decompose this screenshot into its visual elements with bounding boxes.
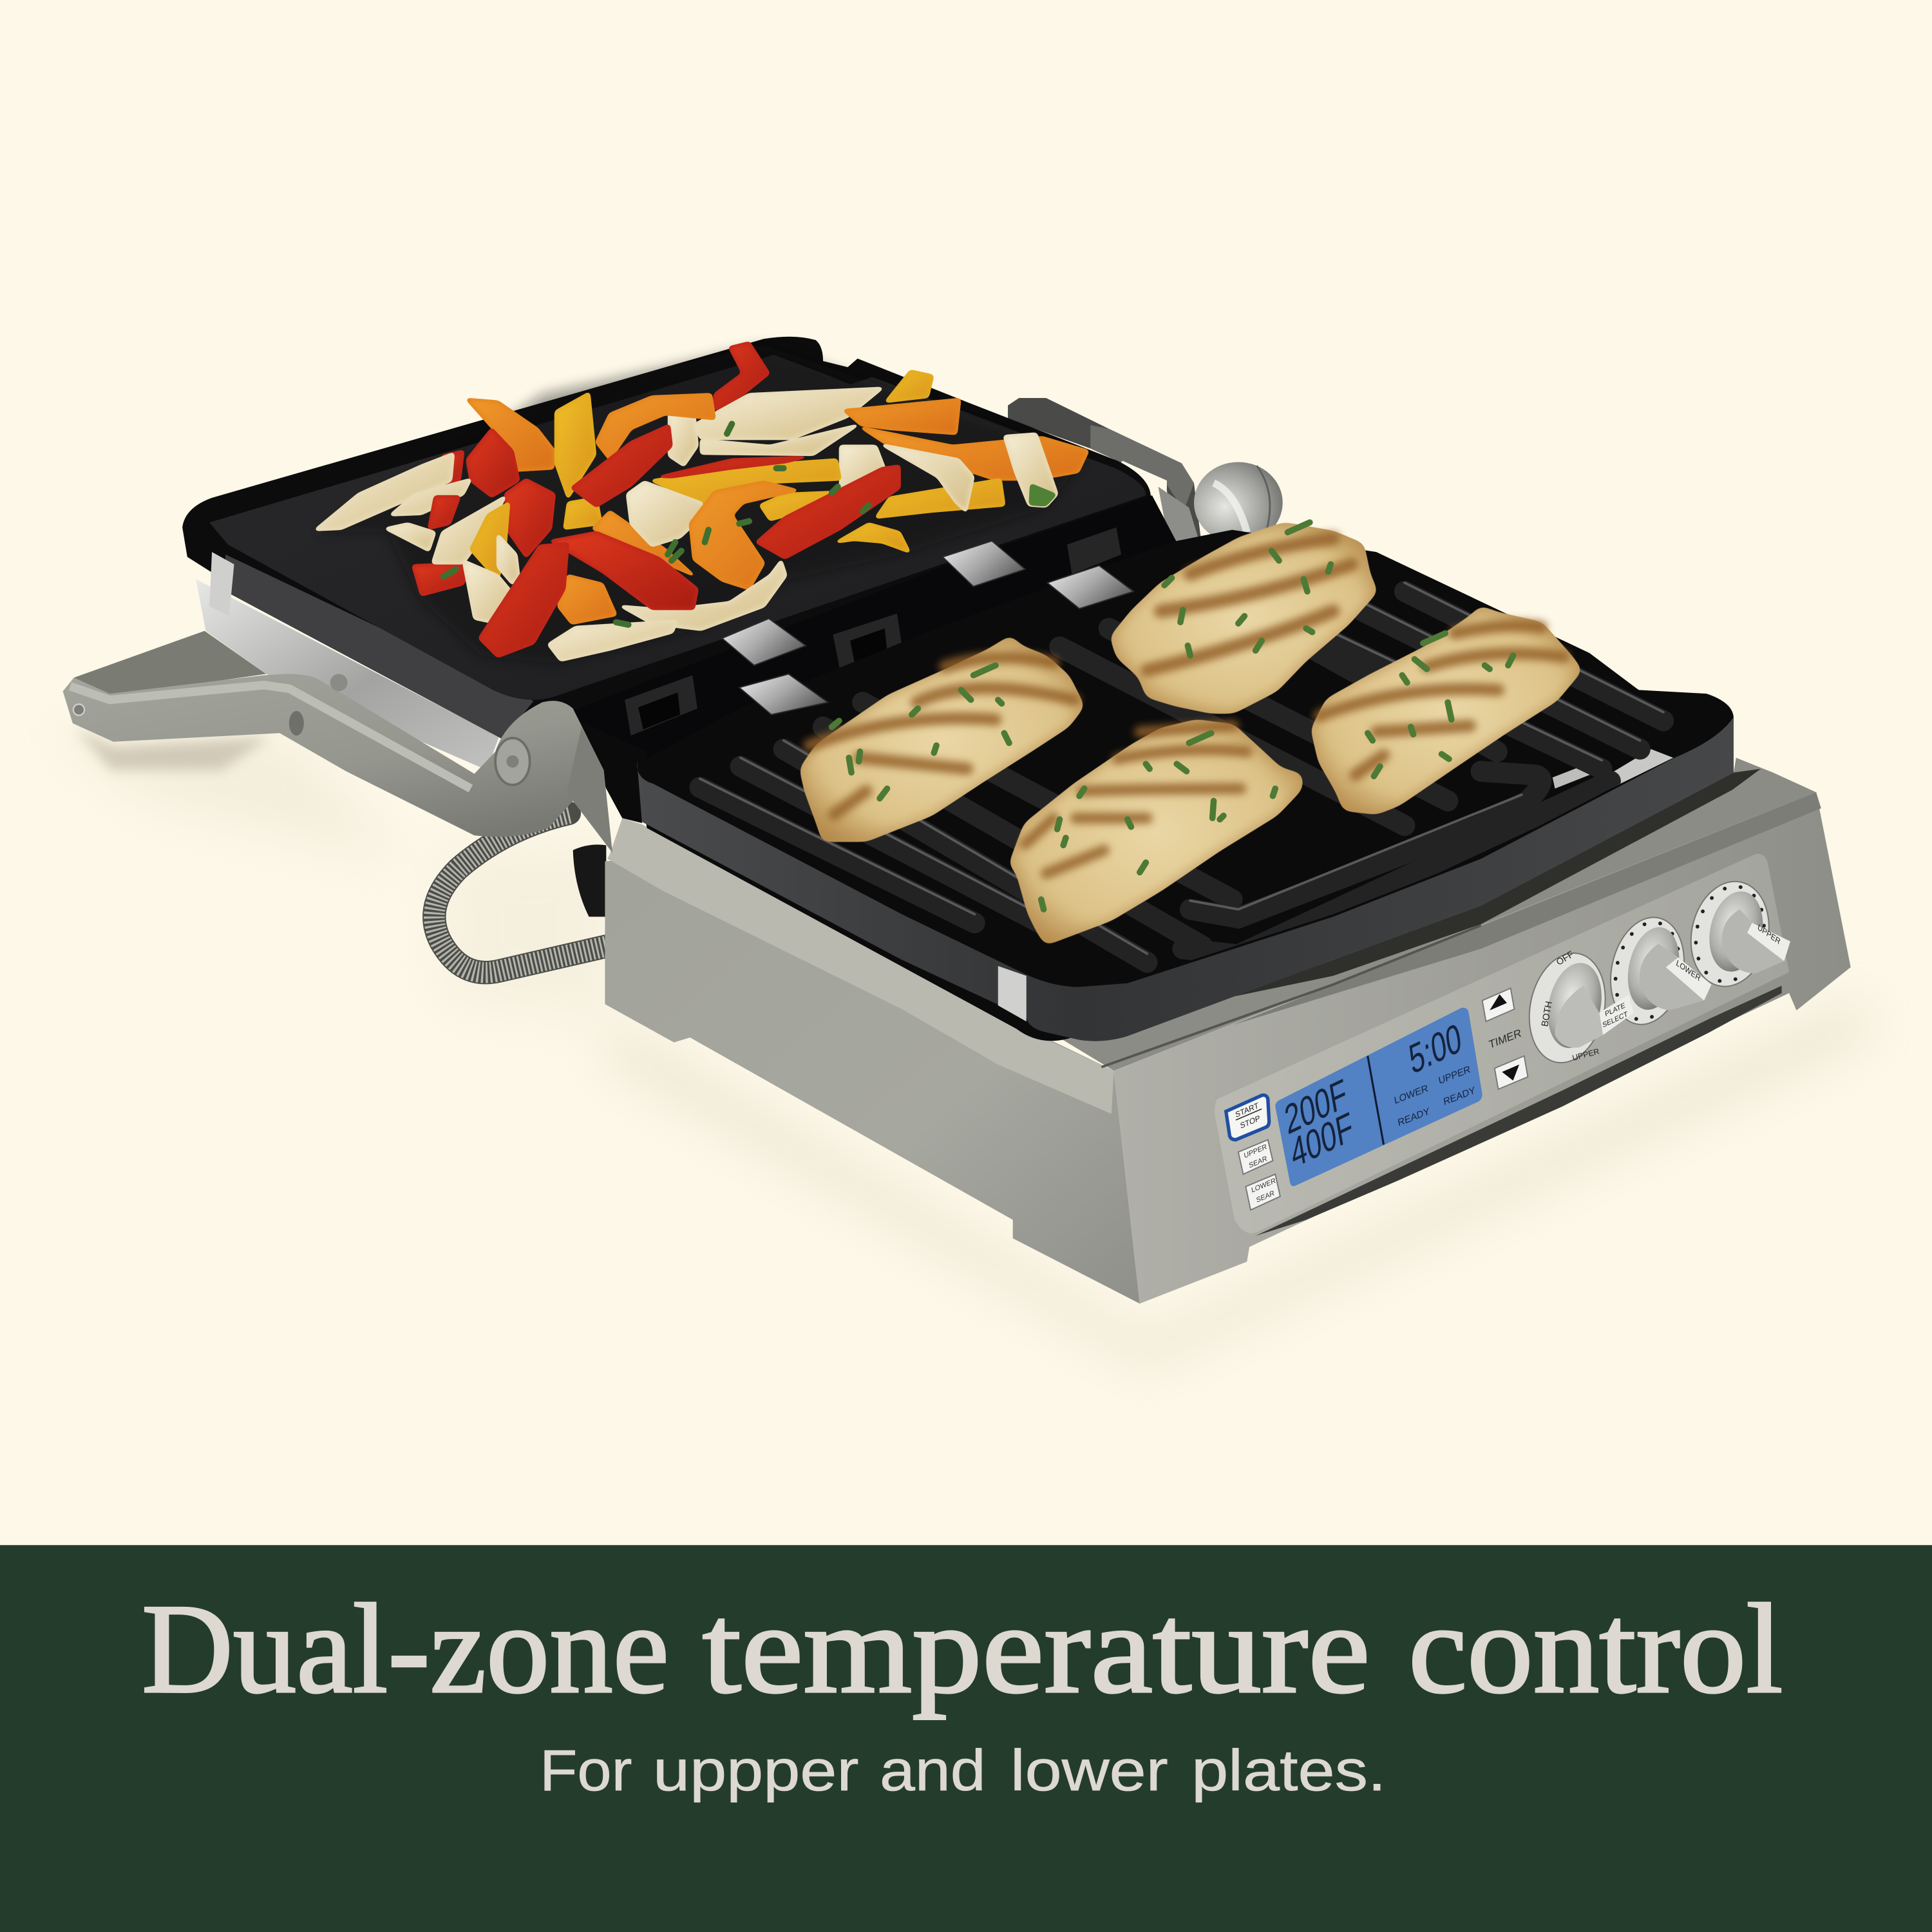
base left face (605, 857, 1140, 1303)
lcd display: READY (1443, 1084, 1476, 1108)
title: Dual-zone (142, 1578, 669, 1720)
silver lip clip (998, 966, 1027, 1021)
subtitle: uppper (653, 1739, 859, 1803)
base front panel (1114, 792, 1851, 1303)
subtitle: and (880, 1739, 986, 1803)
parsley on vegetables (444, 424, 869, 625)
chicken breast: left (801, 637, 1083, 840)
subtitle (540, 1739, 1386, 1803)
chicken breast: bottom (1010, 721, 1301, 944)
vegetable shadow (318, 345, 1084, 663)
steel rear knob (1194, 462, 1283, 544)
lcd display: 5:00 (1406, 1014, 1464, 1083)
chicken breast: right (1312, 607, 1581, 813)
plate select knob: BOTH (1540, 1000, 1555, 1027)
control panel recess (1215, 854, 1789, 1233)
plate select knob: OFF (1555, 949, 1576, 968)
start stop button (1226, 1095, 1269, 1140)
subtitle: lower (1010, 1739, 1168, 1803)
chrome hinge clips (722, 541, 1133, 715)
start stop button: START (1235, 1101, 1260, 1119)
plate select knob (1520, 946, 1634, 1070)
lcd display: 400F (1287, 1103, 1356, 1177)
subtitle: plates. (1191, 1739, 1386, 1803)
upper sear button: UPPER (1244, 1143, 1267, 1160)
grill front lip (637, 717, 1734, 1041)
title: temperature (703, 1578, 1370, 1720)
title: control (1408, 1578, 1783, 1720)
lcd display: 200F (1282, 1070, 1350, 1144)
start stop button: STOP (1240, 1113, 1261, 1131)
groove under grill lip (1101, 769, 1761, 1067)
plate select knob: SELECT (1602, 1010, 1629, 1030)
plate select knob: PLATE (1604, 1001, 1625, 1018)
base top rim (1027, 758, 1816, 1071)
timer controls: TIMER (1488, 1026, 1522, 1051)
rear clip and arm (1008, 398, 1201, 552)
lcd display: LOWER (1394, 1083, 1429, 1106)
timer controls (1482, 988, 1528, 1089)
lower knob: LOWER (1675, 958, 1701, 983)
dark foot behind base (573, 845, 606, 916)
lcd display: UPPER (1437, 1064, 1471, 1087)
lower grill plate (637, 530, 1734, 1041)
handle and hinge (63, 674, 612, 853)
lower sear button: LOWER (1251, 1177, 1276, 1195)
upper sear button: SEAR (1249, 1155, 1267, 1170)
lower sear button (1245, 1174, 1280, 1210)
plate select knob: UPPER (1571, 1046, 1600, 1063)
lcd display (1275, 1008, 1482, 1186)
caption band (0, 1545, 1932, 1932)
lower knob (1601, 911, 1712, 1032)
griddle side silver band (196, 579, 499, 770)
chicken breast: top (1112, 522, 1376, 712)
subtitle: For (540, 1739, 632, 1803)
upper knob: UPPER (1756, 922, 1781, 947)
upper knob (1681, 874, 1790, 994)
dark groove under panel (1256, 986, 1782, 1236)
power cord (434, 813, 606, 972)
lower sear button: SEAR (1256, 1189, 1275, 1204)
title (142, 1578, 1783, 1720)
upper sear button (1238, 1140, 1273, 1174)
lcd display: READY (1397, 1106, 1430, 1129)
left handle back arm (74, 631, 266, 696)
upper griddle plate (182, 337, 1164, 752)
grill ridges (700, 583, 1663, 962)
soft floor shadows (50, 727, 1873, 1368)
base side light strip (607, 818, 1114, 1114)
vegetables on griddle (316, 343, 1088, 661)
front top dark band (1232, 792, 1821, 1025)
hinge blocks between plates (530, 495, 1177, 823)
